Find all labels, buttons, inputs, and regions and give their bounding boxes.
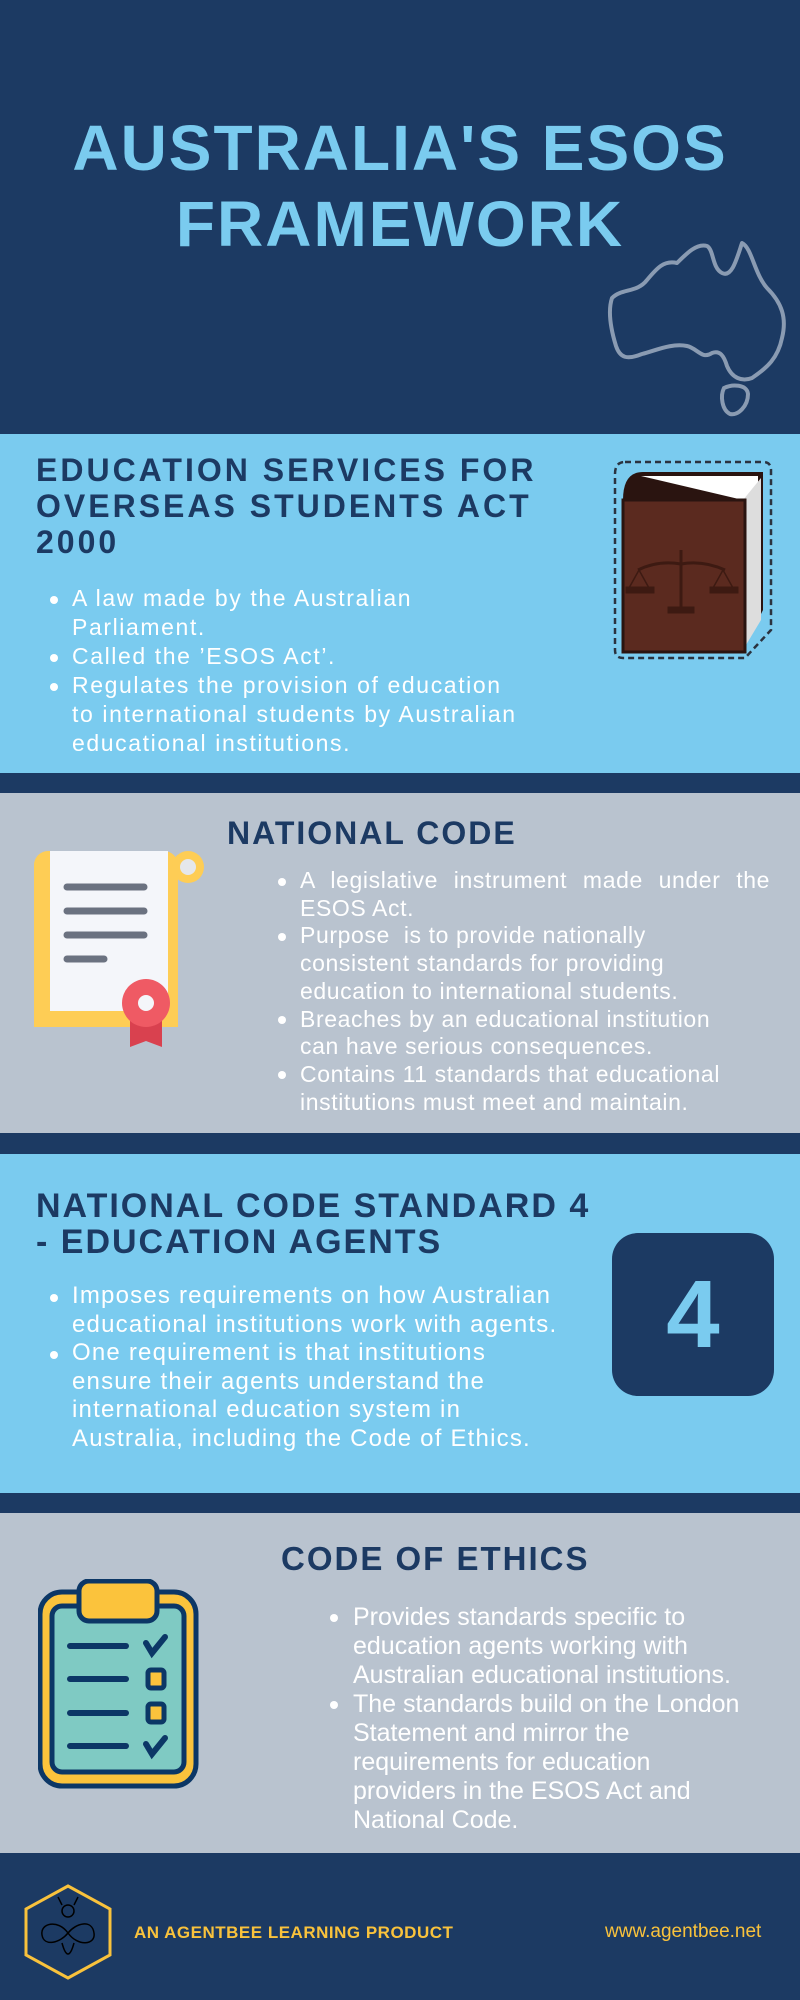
bullet list: code of ethics: Statement and mirror the	[353, 1719, 630, 1747]
bullet list: standard 4: One requirement is that institutions	[72, 1339, 486, 1366]
bullet list: code of ethics: requirements for education	[353, 1748, 650, 1776]
title: AUSTRALIA'S ESOS	[72, 112, 728, 184]
heading: act: OVERSEAS STUDENTS ACT	[36, 488, 532, 524]
bullet list: code of ethics: National Code.	[353, 1806, 518, 1834]
footer text: website: www.agentbee.net	[605, 1921, 761, 1942]
bullet list: code of ethics: providers in the ESOS Act and	[353, 1777, 691, 1805]
bullet list: standard 4	[50, 1282, 557, 1452]
bullet list: national code: Purpose is to provide nationally	[300, 922, 646, 948]
icon: number 4 box: 4	[666, 1261, 720, 1368]
bullet list: act: Parliament.	[72, 614, 206, 640]
icon: clipboard	[38, 1579, 198, 1788]
icon: number 4 box	[612, 1233, 774, 1396]
bullet list: act: Called the ’ESOS Act’.	[72, 643, 336, 669]
heading: act: 2000	[36, 524, 119, 560]
bullet list: national code: A legislative instrument made under the	[300, 867, 770, 893]
bullet list: national code: education to international students.	[300, 978, 678, 1004]
heading: act	[36, 452, 536, 560]
panel: education services act	[0, 434, 800, 773]
heading: national code: NATIONAL CODE	[227, 815, 517, 851]
heading: code of ethics: CODE OF ETHICS	[281, 1540, 590, 1577]
bullet list: standard 4: international education system in	[72, 1396, 461, 1423]
bullet list: act	[50, 585, 517, 756]
heading: act: EDUCATION SERVICES FOR	[36, 452, 536, 488]
heading: standard 4: NATIONAL CODE STANDARD 4	[36, 1187, 590, 1225]
panel: national code	[0, 793, 800, 1133]
bullet list: standard 4: educational institutions work with agents.	[72, 1311, 557, 1338]
bullet list: code of ethics: The standards build on the London	[353, 1690, 739, 1718]
bullet list: national code: can have serious consequences.	[300, 1033, 653, 1059]
heading: standard 4: - EDUCATION AGENTS	[36, 1223, 442, 1261]
panel: standard 4	[0, 1154, 800, 1493]
bullet list: standard 4: Imposes requirements on how Australian	[72, 1282, 551, 1309]
bullet list: standard 4: Australia, including the Code of Ethics.	[72, 1425, 531, 1452]
title	[72, 112, 728, 260]
icon: law book	[614, 460, 772, 660]
bullet list: national code: Breaches by an educational institution	[300, 1006, 710, 1032]
footer text: agentbee: AN AGENTBEE LEARNING PRODUCT	[134, 1923, 453, 1942]
bullet list: national code: institutions must meet and maintain.	[300, 1089, 688, 1115]
bullet list: code of ethics	[330, 1603, 739, 1834]
bullet list: act: A law made by the Australian	[72, 585, 412, 611]
bullet list: act: to international students by Australian	[72, 701, 517, 727]
bullet list: national code: Contains 11 standards that educational	[300, 1061, 720, 1087]
bullet list: act: educational institutions.	[72, 730, 351, 756]
bullet list: national code: consistent standards for providing	[300, 950, 664, 976]
icon: australia map	[608, 241, 786, 416]
bullet list: national code: ESOS Act.	[300, 895, 414, 921]
bullet list: code of ethics: Australian educational institutions.	[353, 1661, 731, 1689]
panel: code of ethics	[0, 1513, 800, 1853]
bullet list: code of ethics: Provides standards specific to	[353, 1603, 685, 1631]
bullet list: national code	[278, 867, 770, 1115]
icon: bee hexagon logo	[24, 1884, 112, 1980]
icon: certificate scroll	[34, 851, 204, 1047]
bullet list: standard 4: ensure their agents understand the	[72, 1368, 485, 1395]
bullet list: act: Regulates the provision of education	[72, 672, 502, 698]
footer	[24, 1884, 762, 1980]
bullet list: code of ethics: education agents working with	[353, 1632, 688, 1660]
heading: standard 4	[36, 1187, 590, 1261]
title: FRAMEWORK	[176, 188, 624, 260]
